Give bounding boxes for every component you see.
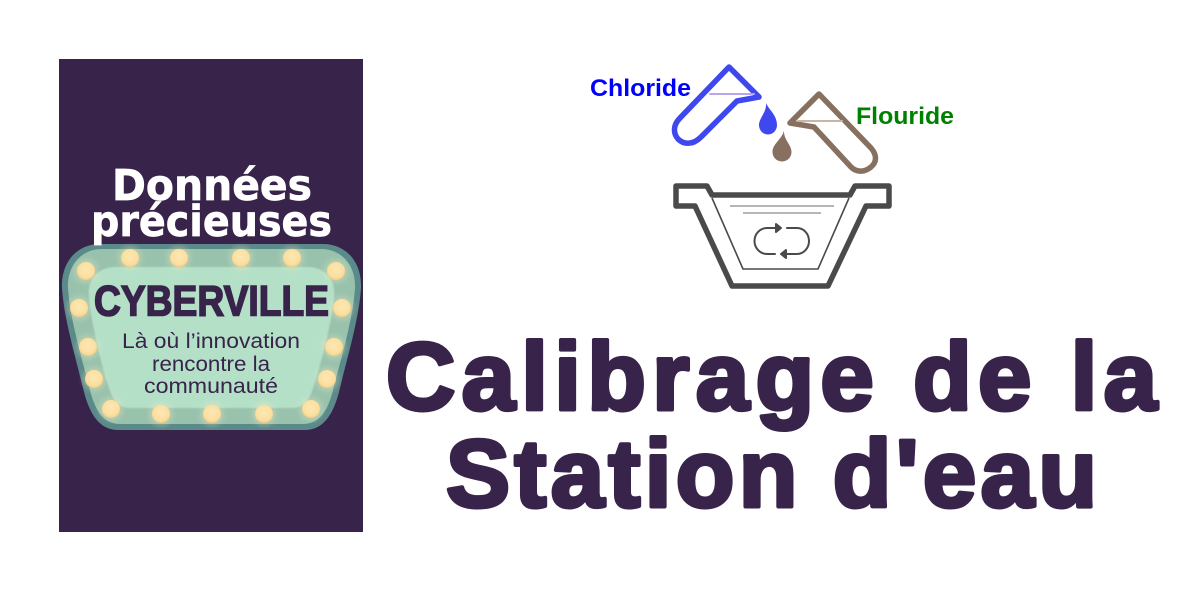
icon: flouride test tube [790,94,876,171]
icon: chloride test tube [674,67,759,143]
heading: Données précieuses: précieuses [91,197,332,247]
label: Flouride: Flouride [856,103,954,130]
icon: blue drop [759,103,777,134]
label: Chloride: Chloride [590,75,691,102]
sign tagline: communauté [144,375,278,398]
icon: calibration basin [676,186,889,286]
heading: Données précieuses: Données [112,161,312,211]
heading: Données précieuses [91,161,332,247]
icon: recirculation arrows [754,224,809,258]
sign tagline: Là où l’innovation [122,330,300,353]
main title: Calibrage de la [386,324,1158,430]
sign title: CYBERVILLE: CYBERVILLE [94,278,329,326]
icon: brown drop [772,129,792,162]
panel: Cyberville poster [59,59,363,532]
sign tagline: rencontre la [152,353,270,376]
marquee light bulbs [70,249,351,423]
main title [386,324,1158,528]
marquee bulb glow [67,246,354,426]
main title: Station d'eau [446,420,1097,528]
sign tagline [122,330,300,398]
marquee sign [62,244,361,430]
